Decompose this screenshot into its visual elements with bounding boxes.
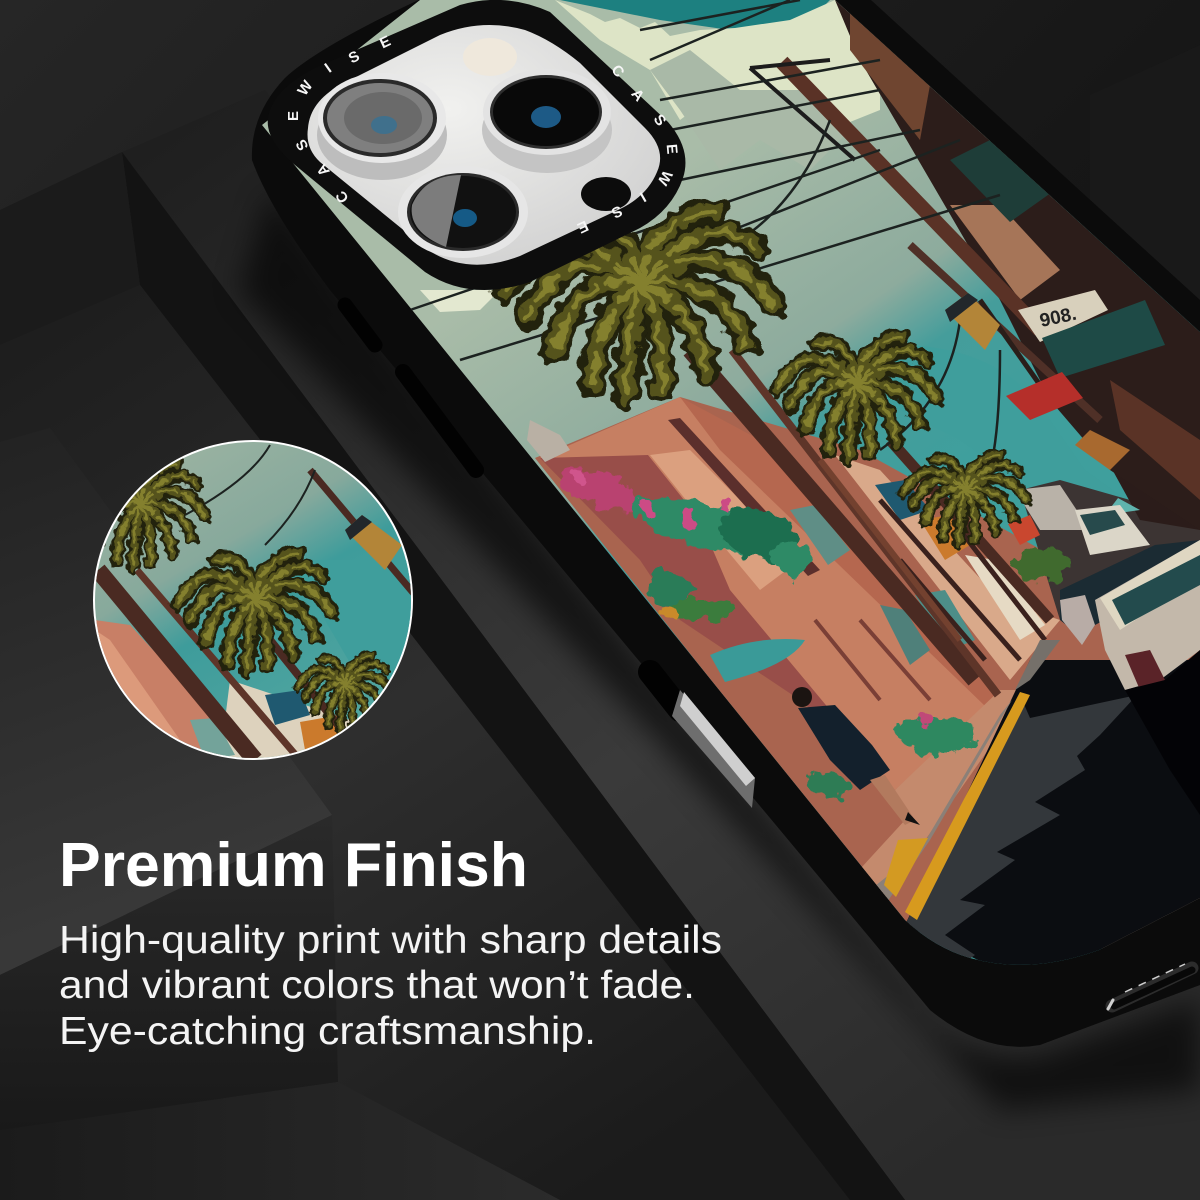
- button slot: action: [345, 305, 375, 345]
- CASEWISE lettering: C: [608, 62, 628, 81]
- CASEWISE lettering: A: [313, 160, 333, 179]
- teal umbrella: [710, 639, 805, 682]
- palm trunks and poles: [690, 350, 1050, 695]
- camera glass: [308, 25, 660, 265]
- lens top right: [482, 69, 612, 173]
- CASEWISE lettering: S: [293, 136, 312, 153]
- phone artwork: street scene: [250, 0, 1200, 1000]
- sidewalk: [862, 690, 1016, 896]
- artwork base under buildings: [535, 397, 1200, 960]
- CASEWISE lettering: [285, 33, 680, 236]
- CASEWISE lettering: E: [285, 111, 302, 121]
- parked cars: [1060, 505, 1200, 815]
- CASEWISE lettering: W: [653, 167, 675, 189]
- text block: Premium Finish: [59, 831, 722, 1053]
- lens bottom: [398, 166, 528, 258]
- CASEWISE lettering: W: [294, 77, 317, 99]
- body copy: [59, 919, 722, 1053]
- distant buildings: [1024, 472, 1200, 620]
- clouds: [555, 0, 880, 130]
- road: [870, 640, 1200, 985]
- pink building: [527, 397, 1000, 790]
- street lamp: [945, 293, 1040, 385]
- button slot: volume: [403, 372, 476, 470]
- telephone pole: [750, 60, 1100, 420]
- microphone: [581, 177, 631, 211]
- storefronts: [790, 455, 1090, 680]
- lens top left: [317, 73, 447, 180]
- phone shadow: [240, 190, 1200, 1110]
- palm tree large: [507, 212, 773, 397]
- block: lower left: [0, 428, 560, 1200]
- sky: [250, 0, 1200, 1000]
- right building: [835, 0, 1200, 530]
- block: upper dark backdrop: [1090, 45, 1200, 330]
- black ring: [268, 0, 685, 290]
- CASEWISE lettering: E: [377, 33, 393, 52]
- CASEWISE lettering: S: [346, 48, 363, 67]
- palm tree far: [904, 455, 1026, 543]
- palm tree middle: [778, 337, 936, 458]
- CASEWISE lettering: S: [609, 202, 625, 221]
- charging port: [1108, 964, 1192, 1009]
- flash: [463, 38, 517, 76]
- body copy: High-quality print with sharp details: [59, 919, 722, 962]
- shop signs: [1006, 290, 1165, 420]
- teal sky corner: [560, 0, 830, 30]
- CASEWISE lettering: E: [575, 217, 591, 236]
- CASEWISE lettering: I: [637, 188, 649, 205]
- shop signs: 908.: [1038, 304, 1078, 332]
- teal band: [895, 346, 922, 362]
- body copy: and vibrant colors that won’t fade.: [59, 964, 695, 1007]
- flowers on building: [555, 459, 808, 620]
- power button: [650, 672, 755, 808]
- heading: Premium Finish: [59, 831, 528, 900]
- CASEWISE lettering: C: [332, 187, 352, 206]
- wires: [410, 0, 1000, 470]
- pedestrian: [792, 687, 920, 825]
- inset circle: zoomed artwork detail: [75, 440, 420, 760]
- CASEWISE lettering: I: [322, 60, 335, 77]
- CASEWISE lettering: S: [650, 111, 669, 129]
- phone case: [252, 0, 1200, 1047]
- body copy: Eye-catching craftsmanship.: [59, 1010, 596, 1053]
- CASEWISE lettering: A: [628, 86, 648, 105]
- camera bump: [268, 0, 685, 290]
- case body: [252, 0, 1200, 1047]
- street bushes: [808, 547, 1068, 798]
- road yellow lines: [884, 692, 1030, 920]
- CASEWISE lettering: E: [663, 143, 680, 155]
